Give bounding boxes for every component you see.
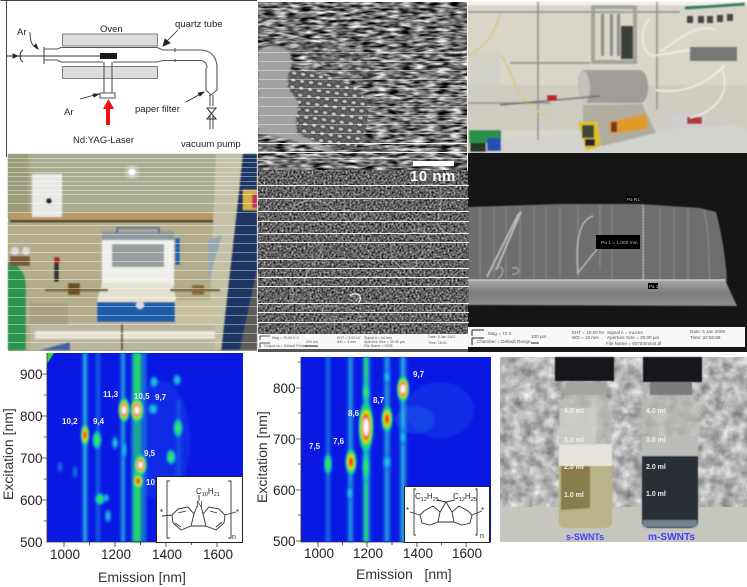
- furnace tube cylinder: [578, 70, 648, 103]
- rods: [468, 2, 680, 140]
- peak labels: 7,5: [309, 442, 321, 451]
- caption: m-SWNTs: m-SWNTs: [648, 531, 695, 543]
- measurement label: [596, 235, 640, 249]
- oven blocks: [62, 34, 158, 78]
- laser arrow: [103, 99, 114, 125]
- decorative scan lines: [8, 52, 469, 342]
- furnace base: [583, 104, 656, 146]
- axis tick labels: 1400: [152, 547, 182, 562]
- panel: SEM image of nanotube network: Output on = Default Printer: [264, 344, 308, 348]
- axis ticks: [296, 357, 491, 547]
- beakers: [471, 52, 500, 96]
- inset: polycarbazole structure: *: [160, 508, 163, 517]
- axis tick labels: 1600: [452, 546, 482, 561]
- panel: SEM cross-section of aligned nanotube film: Pa 1 = 1.003 mm: [601, 240, 638, 246]
- wall lamp reflection: [128, 168, 136, 176]
- panel: SEM cross-section of aligned nanotube film: Date: 5 Jan 2009: [690, 329, 725, 334]
- chart: fluorene polymer photoluminescence map: [254, 357, 491, 582]
- schematic labels: [17, 19, 241, 150]
- panel: SEM cross-section of aligned nanotube film: WD = 18 mm: [572, 335, 599, 340]
- axis tick labels: 1200: [101, 547, 131, 562]
- axis tick labels: [20, 367, 233, 562]
- vial graduation labels: 3.0 ml: [646, 437, 666, 444]
- inset: polyfluorene structure: [404, 486, 490, 542]
- vial graduation labels: 4.0 ml: [564, 408, 584, 415]
- scale bar: [413, 161, 454, 166]
- panel: photo of sorted nanotube vials: [500, 357, 747, 543]
- panel: SEM cross-section of aligned nanotube film: EHT = 10.00 kV: [572, 330, 605, 335]
- axis tick labels: [273, 381, 482, 561]
- flowmeter: [593, 7, 635, 62]
- panel: SEM cross-section of aligned nanotube film: Chamber = Default Range: [477, 339, 531, 344]
- oven base: [97, 283, 177, 302]
- gas cylinder: [8, 262, 26, 350]
- axis tick labels: 1000: [304, 546, 334, 561]
- SEM info bar: [468, 327, 745, 347]
- panel: SEM image of nanotube network: 200 nm: [306, 340, 318, 344]
- rotation arrow: [20, 50, 23, 62]
- schematic labels: paper filter: [135, 104, 180, 115]
- inset: polyfluorene structure: *: [406, 506, 409, 515]
- schematic labels: vacuum pump: [181, 139, 241, 150]
- panel: lab photo of oven in fume hood: [8, 154, 257, 351]
- heatmap 1: [47, 353, 243, 542]
- axis ticks: [42, 353, 243, 547]
- wooden shelf: [10, 213, 228, 222]
- inset: polyfluorene structure: H: [427, 492, 433, 501]
- peak labels: 9,4: [93, 417, 105, 426]
- axis tick labels: 800: [273, 381, 296, 396]
- nanotube bundle cross-section: [288, 71, 368, 148]
- peak labels: 9,5: [144, 449, 156, 458]
- base substrate: [468, 280, 737, 306]
- panel: SEM cross-section of aligned nanotube film: Pa R1: [627, 197, 640, 202]
- multimeter: [578, 121, 601, 151]
- axis tick labels: 1000: [50, 547, 80, 562]
- caption: s-SWNTs: s-SWNTs: [566, 532, 604, 543]
- panel: SEM image of nanotube network: Aperture Size = 30.00 µm: [364, 340, 405, 344]
- vial graduation labels: [564, 408, 666, 499]
- panel: lab photo with tube furnace: [468, 2, 747, 153]
- axis tick labels: 1400: [403, 546, 433, 561]
- inset: polycarbazole structure: *: [236, 508, 239, 517]
- inset: polyfluorene structure: 25: [471, 497, 477, 503]
- small arrows: [12, 30, 204, 102]
- SEM info bar: [258, 334, 469, 349]
- vial graduation labels: 2.0 ml: [646, 464, 666, 471]
- panel: SEM cross-section of aligned nanotube film: Aperture Size = 20.00 µm: [607, 335, 659, 340]
- y axis title: Excitation [nm]: [254, 411, 270, 503]
- controller box: [671, 114, 705, 128]
- schematic labels: Oven: [100, 24, 123, 35]
- vertical striations: [480, 205, 710, 280]
- tubing: [643, 18, 725, 118]
- inset: polycarbazole structure: H: [208, 487, 214, 496]
- vial graduation labels: 1.0 ml: [646, 491, 666, 498]
- panel: SEM image of nanotube network: Mag = 70.00 K X: [272, 336, 299, 340]
- panel: laser furnace schematic: [0, 0, 257, 157]
- panel: SEM image of nanotube network: Signal A = InLens: [364, 336, 392, 340]
- vial graduation labels: 1.0 ml: [564, 492, 584, 499]
- x axis title: Emission [nm]: [98, 569, 186, 585]
- target rod: [7, 55, 101, 57]
- peak labels: [62, 390, 167, 487]
- inset: polyfluorene structure: n: [480, 533, 484, 540]
- right frame and dark post: [208, 154, 242, 350]
- axis tick labels: 1200: [353, 546, 383, 561]
- vial: s-SWNTs: [555, 357, 614, 528]
- panel: SEM image of nanotube network: [258, 170, 469, 352]
- axis tick labels: 1600: [203, 547, 233, 562]
- schematic labels: quartz tube: [175, 19, 223, 30]
- inset: polycarbazole structure: [156, 476, 242, 542]
- panel: SEM cross-section of aligned nanotube film: Signal A = InLens: [607, 330, 643, 335]
- panel: SEM image of nanotube network: Time: 16:01: [428, 341, 447, 345]
- inset: polycarbazole structure: n: [232, 534, 236, 541]
- panel: SEM cross-section of aligned nanotube film: Pa 1: [649, 284, 659, 289]
- oven lid: [102, 231, 174, 247]
- paper notice: [32, 174, 62, 217]
- peak labels: 10: [146, 478, 155, 487]
- inset: polycarbazole structure: 21: [214, 492, 220, 498]
- panel: SEM cross-section of aligned nanotube film: [468, 153, 747, 352]
- backdrop: [500, 357, 747, 509]
- y axis title: Excitation [nm]: [0, 408, 16, 500]
- peak labels: 11,3: [103, 390, 119, 399]
- peak labels: [309, 370, 425, 451]
- peak labels: 9,7: [155, 393, 167, 402]
- peak labels: 9,7: [413, 370, 425, 379]
- panel: SEM cross-section of aligned nanotube film: Time: 22:56:58: [690, 335, 721, 340]
- axis tick labels: 700: [273, 432, 296, 447]
- axis tick labels: 600: [20, 493, 43, 508]
- inset: polycarbazole structure: 10: [202, 492, 208, 498]
- empty vacuum area: [258, 47, 335, 153]
- inset: polyfluorene structure: H: [465, 492, 471, 501]
- panel: SEM cross-section of aligned nanotube film: 100 µm: [531, 334, 547, 339]
- panel: TEM micrograph: [258, 2, 467, 170]
- heatmap 2: [301, 357, 491, 542]
- inset: polyfluorene structure: *: [481, 506, 484, 515]
- vial: m-SWNTs: [642, 357, 702, 528]
- vial graduation labels: 3.0 ml: [564, 437, 584, 444]
- schematic labels: Ar: [64, 107, 74, 118]
- panel: SEM image of nanotube network: File Name = 0038: [364, 344, 392, 348]
- peak labels: 8,7: [373, 396, 385, 405]
- bench: [30, 322, 215, 350]
- x axis title: Emission [nm]: [356, 566, 452, 582]
- schematic labels: Ar: [17, 27, 26, 38]
- quartz tube: [44, 47, 217, 129]
- panel: SEM image of nanotube network: Date: 5 Jan 2001: [428, 335, 455, 339]
- vial graduation labels: 4.0 ml: [646, 408, 666, 415]
- peak labels: 8,6: [348, 409, 360, 418]
- panel: SEM image of nanotube network: EHT = 3.00 kV: [337, 336, 361, 340]
- schematic labels: Nd:YAG-Laser: [73, 135, 134, 146]
- inset: polycarbazole structure: N: [196, 500, 202, 509]
- regulators: [687, 14, 733, 23]
- inset: polycarbazole structure: C: [196, 487, 202, 496]
- inset: polyfluorene structure: 25: [433, 497, 439, 503]
- axis tick labels: 500: [20, 535, 43, 550]
- axis tick labels: 500: [273, 534, 296, 549]
- axis tick labels: 900: [20, 367, 43, 382]
- inset: polyfluorene structure: 12: [459, 497, 465, 503]
- panel: SEM image of nanotube network: WD = 3 mm: [337, 340, 356, 344]
- axis tick labels: 800: [20, 409, 43, 424]
- inset: polyfluorene structure: C: [415, 492, 421, 501]
- TEM scale label: 10 nm: [410, 168, 456, 185]
- peak labels: 7,6: [333, 437, 345, 446]
- panel: SEM cross-section of aligned nanotube film: Mag = 72 X: [488, 331, 512, 336]
- axis tick labels: 700: [20, 451, 43, 466]
- valve: [207, 108, 216, 119]
- inset: polyfluorene structure: C: [453, 492, 459, 501]
- peak labels: 10,5: [134, 392, 150, 401]
- peak labels: 10,2: [62, 417, 78, 426]
- inset: polyfluorene structure: 12: [421, 497, 427, 503]
- vial graduation labels: 2.0 ml: [564, 464, 584, 471]
- panel: SEM cross-section of aligned nanotube film: File Name = 90704mmot.tif: [606, 341, 662, 346]
- axis tick labels: 600: [273, 483, 296, 498]
- chart: carbazole polymer photoluminescence map: [0, 353, 243, 585]
